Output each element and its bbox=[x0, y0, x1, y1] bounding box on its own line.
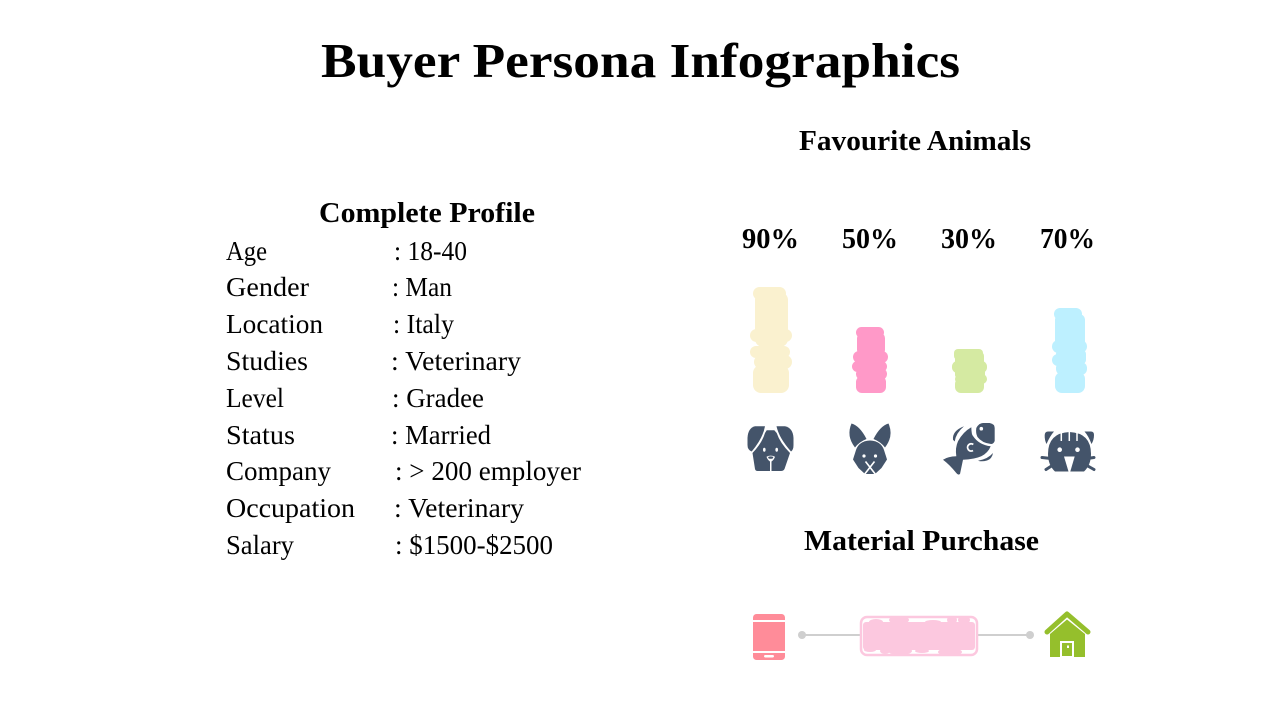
profile rows: : Veterinary bbox=[394, 493, 525, 523]
icon: house bbox=[1047, 614, 1088, 657]
heading: favourite animals: Favourite Animals bbox=[799, 126, 1031, 157]
connector line with end dots bbox=[798, 631, 1034, 639]
icon: rabbit bbox=[849, 424, 891, 475]
heading: complete profile: Complete Profile bbox=[319, 198, 535, 229]
profile rows: : > 200 employer bbox=[395, 456, 581, 486]
panel: material purchase bbox=[753, 526, 1088, 660]
profile rows: Age bbox=[226, 236, 267, 266]
profile rows: : $1500-$2500 bbox=[395, 530, 553, 560]
bar: fish bbox=[952, 349, 987, 393]
heading: material purchase: Material Purchase bbox=[804, 526, 1039, 557]
progress box bbox=[861, 616, 977, 656]
percentage: fish 30%: 30% bbox=[941, 224, 997, 255]
profile rows: Status bbox=[226, 420, 295, 450]
bar: cat bbox=[1052, 308, 1087, 393]
title: Buyer Persona Infographics bbox=[321, 33, 960, 88]
panel: favourite animals bbox=[742, 126, 1095, 475]
profile rows: Salary bbox=[226, 530, 294, 560]
profile rows: Company bbox=[226, 456, 331, 486]
profile rows bbox=[226, 236, 581, 560]
profile rows: : 18-40 bbox=[394, 236, 467, 266]
profile rows: Occupation bbox=[226, 493, 356, 523]
profile rows: Location bbox=[226, 309, 323, 339]
profile rows: Gender bbox=[226, 272, 309, 302]
icon: dog bbox=[748, 426, 794, 471]
panel: complete profile bbox=[226, 198, 581, 560]
icon: phone bbox=[753, 614, 785, 660]
percentage: rabbit 50%: 50% bbox=[842, 224, 898, 255]
percentage: cat 70%: 70% bbox=[1040, 224, 1095, 255]
profile rows: : Veterinary bbox=[391, 346, 522, 376]
profile rows: : Gradee bbox=[392, 383, 484, 413]
icon: cat bbox=[1042, 431, 1094, 472]
profile rows: : Italy bbox=[393, 309, 454, 339]
profile rows: : Married bbox=[391, 420, 491, 450]
profile rows: Level bbox=[226, 383, 284, 413]
bar: dog bbox=[750, 287, 792, 393]
icon: fish bbox=[943, 423, 995, 475]
profile rows: Studies bbox=[226, 346, 308, 376]
bar: rabbit bbox=[852, 327, 888, 393]
profile rows: : Man bbox=[392, 272, 452, 302]
percentage: dog 90%: 90% bbox=[742, 224, 799, 255]
